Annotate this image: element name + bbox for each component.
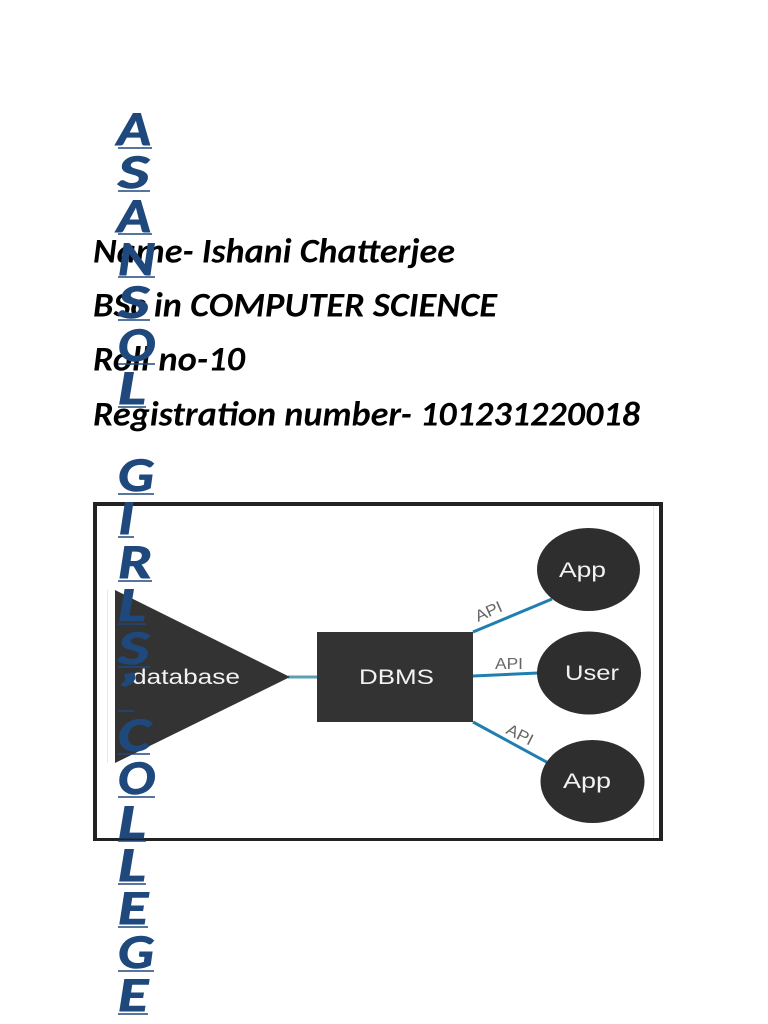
vertical title: Asansol Girls' College: L [118, 792, 146, 852]
API labels: API [473, 599, 505, 626]
vertical title: Asansol Girls' College: C [118, 705, 153, 765]
bottom App circle [540, 740, 644, 823]
vertical title: Asansol Girls' College: A [115, 186, 151, 246]
vertical title: Asansol Girls' College: A [115, 99, 151, 159]
vertical title: Asansol Girls' College: N [118, 229, 155, 289]
vertical title: Asansol Girls' College: L [118, 835, 146, 895]
vertical title: Asansol Girls' College: G [118, 445, 154, 505]
registration number: Registration number- 101231220018 [93, 394, 641, 436]
vertical title: Asansol Girls' College [113, 99, 155, 1024]
DBMS box [317, 632, 473, 722]
vertical title: Asansol Girls' College: L [118, 575, 146, 635]
vertical title: Asansol Girls' College: S [117, 272, 151, 332]
student details text block [93, 232, 641, 436]
vertical title: Asansol Girls' College: L [118, 358, 146, 418]
User circle [537, 632, 641, 714]
top App circle: App [559, 559, 606, 582]
vertical title: Asansol Girls' College: R [118, 532, 152, 592]
bottom App circle: App [563, 770, 611, 793]
API labels: API [495, 656, 523, 673]
vertical title: Asansol Girls' College: ’ [113, 662, 136, 722]
User circle: User [565, 662, 619, 685]
API labels [473, 599, 536, 749]
vertical title: Asansol Girls' College: O [118, 315, 155, 375]
vertical title: Asansol Girls' College: O [118, 748, 155, 808]
title underlines [118, 148, 155, 1014]
course: BSc in COMPUTER SCIENCE [93, 286, 499, 326]
student name: Name- Ishani Chatterjee [93, 232, 455, 272]
top App circle [537, 528, 640, 611]
panel: DBMS diagram [93, 502, 663, 841]
vertical title: Asansol Girls' College: E [118, 965, 149, 1024]
vertical title: Asansol Girls' College: E [118, 878, 149, 938]
DBMS box: DBMS [359, 666, 434, 689]
vertical title: Asansol Girls' College: S [117, 618, 151, 678]
vertical title: Asansol Girls' College: S [117, 142, 151, 202]
roll number: Roll no-10 [93, 340, 246, 380]
vertical title: Asansol Girls' College: I [118, 488, 134, 548]
vertical title: Asansol Girls' College: G [118, 922, 154, 982]
API labels: API [503, 721, 536, 749]
database triangle: database [132, 666, 240, 689]
connector lines [288, 599, 552, 765]
database triangle [115, 590, 290, 763]
diagram frame [93, 502, 663, 841]
